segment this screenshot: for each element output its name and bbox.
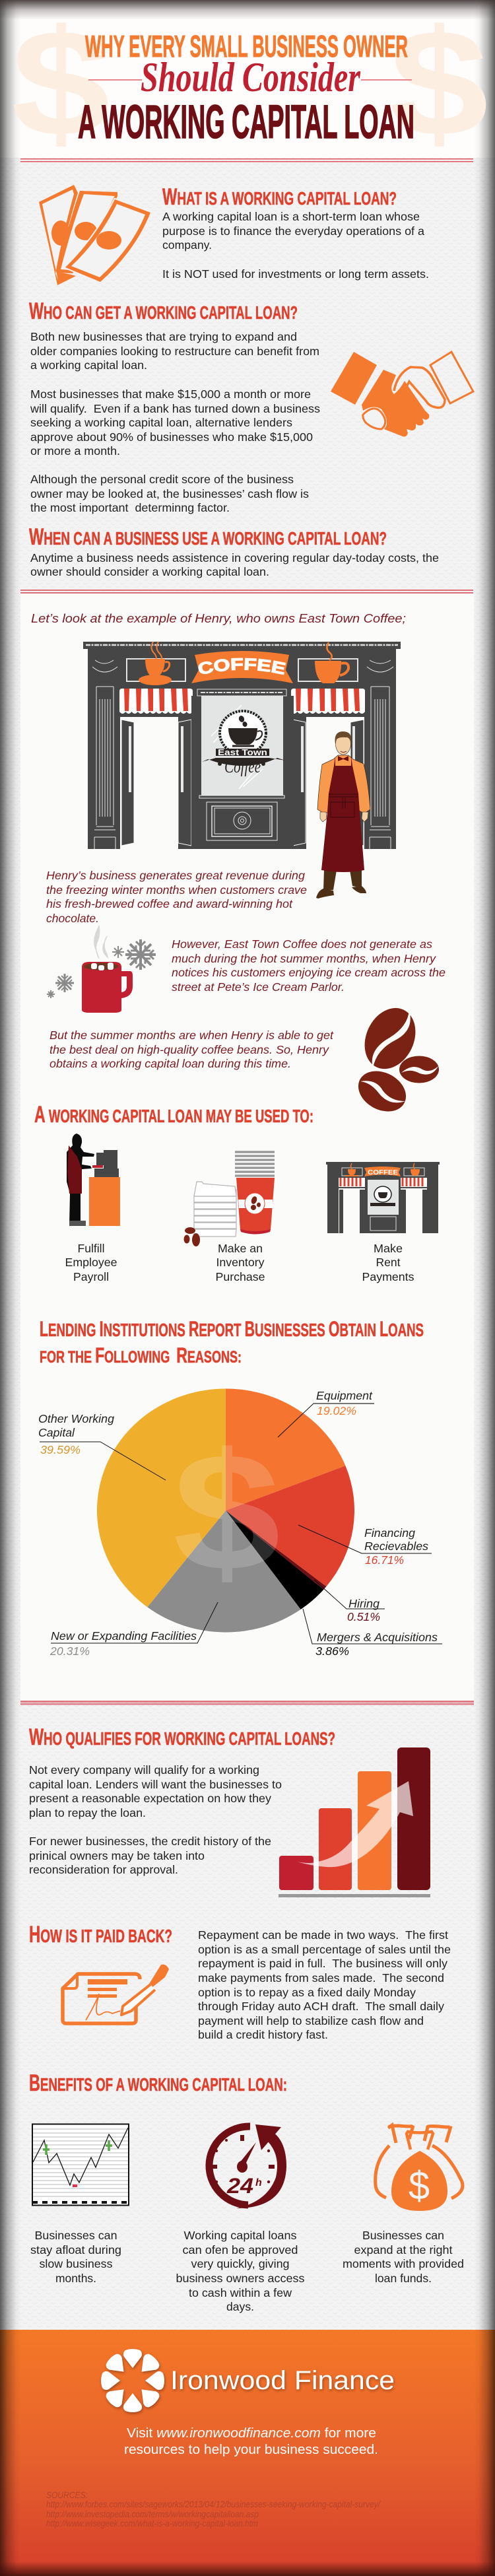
decorative dollar signs: $ — [11, 0, 110, 168]
center door — [191, 689, 294, 849]
text: expand — [343, 2229, 464, 2285]
icon: money bags: $ — [409, 2163, 430, 2208]
body text: reconsideration for approval. — [29, 1863, 178, 1876]
label: new or expanding facilities: 20.31% — [50, 1644, 90, 1658]
illustration: Henry in apron — [316, 731, 370, 898]
icon: coffee beans — [351, 1000, 439, 1120]
body text: Although the personal credit score of the business — [30, 473, 294, 486]
divider — [20, 590, 473, 593]
text: expand: moments with provided — [343, 2257, 464, 2270]
label: other working capital — [38, 1412, 166, 1480]
label: mergers and acquisitions: 3.86% — [315, 1644, 349, 1658]
text: stay afloat — [30, 2229, 121, 2285]
window frames — [127, 659, 358, 681]
shirt — [317, 755, 370, 813]
body text: A working capital loan is a short-term loan whose — [162, 210, 420, 223]
sources: http://www.forbes.com/sites/sageworks/2013/04/12/businesses-seeking-working-capital-survey/ — [46, 2499, 381, 2509]
caption: payroll: Payroll — [73, 1270, 109, 1283]
text: stay afloat: stay afloat during — [30, 2243, 121, 2256]
sign banner: COFFEE — [198, 658, 286, 675]
story text: loan timing: But the summer months are when Henry is able to get — [50, 1029, 334, 1042]
label: other working capital: Capital — [38, 1426, 75, 1439]
label: equipment: Equipment — [316, 1389, 373, 1402]
story text: winter: chocolate. — [46, 912, 99, 925]
heading: a working capital loan may be used to: A WORKING CAPITAL LOAN MAY BE USED TO: — [34, 1102, 314, 1128]
icon: left cup — [139, 642, 172, 685]
body text: seeking a working capital loan, alternative lenders — [30, 416, 292, 429]
caption: rent: Make — [374, 1242, 403, 1255]
lower door panel — [199, 796, 284, 840]
text: approved quickly: very quickly, giving — [191, 2257, 289, 2270]
icon: right cup — [315, 642, 348, 683]
body text: a working capital loan. — [30, 358, 147, 372]
body text: option is as a small percentage of sales until the — [198, 1943, 451, 1956]
pie chart: reasons for obtaining loans — [38, 1389, 442, 1658]
label: mergers and acquisitions — [303, 1609, 442, 1658]
body text: build a credit history fast. — [198, 2028, 328, 2041]
body text: For newer businesses, the credit history of the — [29, 1835, 271, 1848]
caption: rent: Payments — [362, 1270, 414, 1283]
story text: loan timing — [50, 1029, 334, 1070]
body text: It is NOT used for investments or long term assets. — [162, 267, 429, 281]
body text: approve about 90% of businesses who make $15,000 — [30, 430, 313, 444]
story text: winter: his fresh-brewed coffee and award-winning hot — [46, 897, 293, 910]
panel: who qualifies — [29, 1724, 335, 1876]
panel: benefits — [30, 2124, 464, 2313]
label: financing receivables: Financing — [364, 1526, 415, 1540]
icon: signed contract — [63, 1965, 169, 2023]
red cup — [236, 1178, 275, 1232]
caption: rent — [362, 1242, 414, 1283]
text: stay afloat: slow business — [40, 2257, 113, 2270]
sources: http://www.investopedia.com/terms/w/workingcapitalloan.asp — [46, 2509, 259, 2519]
body text: through Friday auto ACH draft. The small daily — [198, 2000, 444, 2013]
icon: hot chocolate mug with snowflakes — [47, 926, 156, 1013]
footer: Ironwood Finance — [46, 2349, 395, 2528]
call to action — [124, 2425, 378, 2457]
caption: inventory: Purchase — [215, 1270, 265, 1283]
text: approved quickly: days. — [226, 2300, 254, 2313]
head — [335, 731, 351, 755]
label: hiring: 0.51% — [347, 1610, 380, 1623]
body text — [29, 1763, 282, 1876]
label: new or expanding facilities: New or Expanding Facilities — [51, 1629, 197, 1643]
story text: summer: notices his customers enjoying ice cream across the — [172, 966, 446, 979]
label: new or expanding facilities — [50, 1602, 218, 1658]
small beans — [183, 1227, 200, 1246]
divider — [20, 158, 473, 162]
body text: company. — [162, 238, 212, 252]
mug — [82, 962, 121, 1013]
story text: loan timing: obtains a working capital loan during this time. — [50, 1057, 291, 1070]
body text — [30, 330, 320, 514]
window logo — [202, 711, 286, 776]
heading: HOW IS IT PAID BACK? — [29, 1922, 172, 1948]
body text: capital loan. Lenders will want the businesses to — [29, 1778, 282, 1791]
door leaves — [121, 720, 364, 846]
heading: lending institutions report: FOR THE FOLLOWING REASONS: — [40, 1343, 242, 1367]
marshmallows — [91, 963, 114, 970]
label: other working capital: Other Working — [38, 1412, 114, 1425]
sources: SOURCES: — [46, 2490, 88, 2500]
body text: repayment is paid in full. The business will only — [198, 1957, 447, 1970]
body text: Repayment can be made in two ways. The first — [198, 1928, 448, 1942]
slice: other working capital — [97, 1389, 226, 1607]
text: approved quickly: to cash within a few — [189, 2286, 292, 2299]
caption: payroll: Fulfill — [78, 1242, 104, 1255]
slice: new or expanding facilities — [147, 1510, 301, 1632]
body text: or more a month. — [30, 444, 120, 458]
body text: payment will help to stabilize cash flow and — [198, 2014, 424, 2027]
stacked lids — [194, 1182, 236, 1237]
heading: lending institutions report — [40, 1317, 424, 1367]
illustration: coffee shop storefront — [83, 642, 401, 849]
sources — [46, 2490, 381, 2528]
panel: who can get a working capital loan — [29, 298, 320, 514]
icon: small storefront — [326, 1162, 440, 1233]
label: equipment: 19.02% — [317, 1404, 356, 1417]
story text: summer: much during the hot summer months, when Henry — [172, 952, 436, 965]
label: financing receivables: 16.71% — [365, 1553, 404, 1567]
body text: the most important determinng factor. — [30, 501, 230, 514]
label: hiring: Hiring — [348, 1597, 380, 1610]
story text: summer — [172, 937, 446, 994]
label: financing receivables: Recievables — [364, 1540, 428, 1553]
story text: summer: street at Pete’s Ice Cream Parlor. — [172, 980, 345, 994]
steam — [94, 926, 108, 959]
caption: inventory — [215, 1242, 265, 1283]
text: approved quickly: Working capital loans — [183, 2229, 297, 2242]
dollar watermark: $ — [173, 1418, 280, 1606]
title line 2: Should Consider — [141, 53, 361, 100]
body text: Both new businesses that are trying to expand and — [30, 330, 297, 343]
caption: payroll — [65, 1242, 117, 1283]
icon: 24 hour clock: h — [255, 2177, 262, 2188]
body text: purpose is to finance the everyday operations of a — [162, 224, 424, 238]
body text: Not every company will qualify for a working — [29, 1763, 259, 1777]
header title block — [11, 0, 488, 168]
body text: owner may be looked at, the businesses’ cash flow is — [30, 487, 309, 500]
apron — [321, 757, 364, 872]
body text: owner should consider a working capital loan. — [30, 565, 269, 578]
story text: winter: the freezing winter months when customers crave — [46, 883, 307, 897]
bow tie — [338, 756, 348, 761]
company name: Ironwood Finance — [170, 2366, 395, 2395]
window logo: East Town — [218, 748, 267, 757]
snowflakes — [47, 939, 156, 998]
icon: 24 hour clock — [209, 2124, 286, 2208]
window logo: Coffee — [224, 757, 261, 776]
body text: older companies looking to restructure can benefit from — [30, 345, 319, 358]
label: mergers and acquisitions: Mergers & Acquisitions — [317, 1631, 438, 1644]
caption: rent: Rent — [376, 1256, 401, 1269]
text: approved quickly: can ofen be approved — [182, 2243, 298, 2256]
body text: Anytime a business needs assistence in covering regular day-today costs, the — [30, 551, 439, 564]
sign banner — [191, 651, 293, 683]
icon: money bags — [376, 2125, 463, 2211]
body text — [162, 210, 429, 281]
body text: option is to repay as a fixed daily Monday — [198, 1986, 416, 1999]
label: equipment — [278, 1389, 374, 1437]
heading: WHAT IS A WORKING CAPITAL LOAN? — [162, 184, 397, 210]
decorative dollar signs: $ — [389, 0, 488, 168]
heading: lending institutions report: LENDING INSTITUTIONS REPORT BUSINESSES OBTAIN LOANS — [40, 1317, 424, 1341]
bar chart: growth with arrow — [279, 1747, 430, 1897]
body text — [198, 1928, 451, 2041]
icon: 24 hour clock: 24 — [226, 2174, 253, 2198]
body text — [30, 551, 439, 578]
panel: when can a business use a working capital loan — [29, 524, 439, 578]
heading: benefits: BENEFITS OF A WORKING CAPITAL LOAN: — [29, 2070, 287, 2096]
caption: inventory: Inventory — [216, 1256, 265, 1269]
body text: Most businesses that make $15,000 a month or more — [30, 388, 311, 401]
body text: will qualify. Even if a bank has turned down a business — [30, 402, 320, 415]
legs — [316, 870, 366, 898]
logo mark — [101, 2349, 164, 2412]
icon: small storefront: COFFEE — [368, 1169, 398, 1176]
text: expand: expand at the right — [354, 2243, 453, 2256]
door openings — [120, 717, 364, 850]
hands — [320, 812, 368, 822]
decorative dollar signs — [11, 0, 488, 168]
awnings — [119, 689, 365, 714]
label: hiring — [314, 1580, 385, 1623]
slice: hiring — [226, 1510, 326, 1590]
heading: WHO QUALIFIES FOR WORKING CAPITAL LOANS? — [29, 1724, 335, 1750]
panel: uses of a loan — [65, 1134, 440, 1283]
text: expand: Businesses can — [362, 2229, 444, 2242]
label: other working capital: 39.59% — [40, 1443, 81, 1456]
heading: WHO CAN GET A WORKING CAPITAL LOAN? — [29, 298, 298, 324]
body text: present a reasonable expectation on how they — [29, 1792, 271, 1805]
sources: http://www.wisegeek.com/what-is-a-working-capital-loan.htm — [46, 2518, 258, 2528]
caption: payroll: Employee — [65, 1256, 117, 1269]
label: financing receivables — [298, 1525, 432, 1567]
body text: make payments from sales made. The second — [198, 1971, 444, 1984]
icon: barista at espresso machine — [67, 1134, 120, 1226]
story text: winter — [46, 869, 307, 925]
slice: financing receivables — [226, 1466, 354, 1586]
story text: loan timing: the best deal on high-quality coffee beans. So, Henry — [50, 1043, 329, 1056]
stacked cups — [235, 1151, 275, 1178]
body text: prinical owners may be taken into — [29, 1849, 205, 1862]
icon: cup and lid stacks — [183, 1151, 275, 1246]
arrow — [297, 1781, 413, 1867]
body text: plan to repay the loan. — [29, 1806, 146, 1819]
text: stay afloat: months. — [55, 2272, 96, 2285]
story text: winter: Henry’s business generates great revenue during — [46, 869, 305, 882]
intro text: example of Henry: Let’s look at the example of Henry, who owns East Town Coffee; — [31, 611, 406, 625]
slice: mergers — [226, 1510, 323, 1610]
text: approved quickly — [176, 2229, 305, 2313]
icon: money bills — [39, 185, 150, 285]
building facade — [83, 642, 401, 849]
panel: how is it paid back — [29, 1922, 451, 2041]
divider — [20, 1701, 474, 1705]
text: approved quickly: business owners access — [176, 2272, 305, 2285]
call to action: resources to help your business succeed. — [124, 2442, 378, 2457]
text: expand: loan funds. — [375, 2272, 432, 2285]
icon: stock chart — [32, 2124, 129, 2205]
story text: summer: However, East Town Coffee does not generate as — [172, 937, 432, 951]
slice: equipment — [226, 1389, 345, 1510]
icon: handshake — [331, 352, 473, 436]
text: stay afloat: Businesses can — [34, 2229, 117, 2242]
caption: inventory: Make an — [218, 1242, 263, 1255]
panel: what is a working capital loan — [162, 184, 429, 281]
column detail — [92, 660, 393, 849]
call to action: Visit www.ironwoodfinance.com for more — [127, 2425, 376, 2441]
